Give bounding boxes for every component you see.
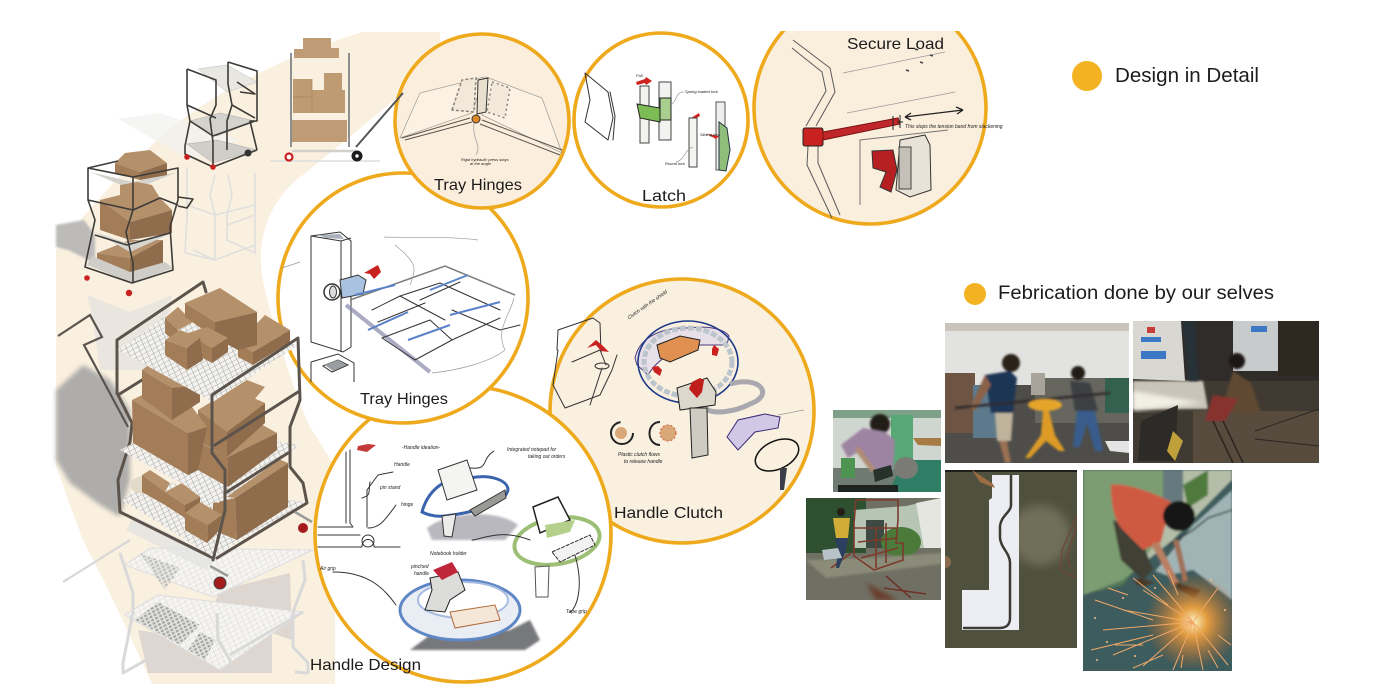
sketch: handle design details	[318, 444, 603, 650]
legend: febrication: Febrication done by our selves	[998, 283, 1274, 304]
front frame	[212, 338, 307, 560]
trolley 1: main loaded trolley	[58, 282, 312, 589]
photo: man at lathe	[833, 410, 941, 492]
sketch: secure load details	[792, 40, 1003, 218]
circle: secure load	[754, 0, 1003, 224]
photo: rust frame outdoors	[806, 498, 941, 600]
sketch: latch details: Spring loaded lock	[685, 89, 719, 94]
bottom tray	[122, 480, 307, 557]
sketch: handle design details: pinched	[410, 564, 429, 570]
trolley 3: empty frame	[118, 62, 257, 260]
reflection: trolley 2	[87, 295, 172, 370]
sketch: handle design details: Notebook holder	[430, 551, 467, 557]
sketch: handle design details: Tape grip	[566, 609, 587, 615]
circle: latch	[574, 33, 748, 207]
label: Handle Design: Handle Design	[310, 657, 421, 674]
circle: handle design	[315, 386, 611, 682]
circle: tray hinges large	[278, 173, 528, 423]
sketch: tray hinge column	[282, 232, 520, 382]
upper mesh tray	[118, 318, 298, 402]
photo: angle grinder sparks	[1083, 470, 1232, 671]
middle tray	[120, 425, 300, 503]
label: Latch: Latch	[642, 188, 686, 205]
label: Tray Hinges: Tray Hinges	[360, 391, 448, 408]
sketch: handle design details: -Handle ideation-	[402, 445, 440, 451]
reflection: trolley 3	[185, 167, 255, 260]
legend: design in detail	[1072, 61, 1259, 91]
photo: grinding at night	[1133, 321, 1319, 463]
circle: tray hinges upper	[395, 34, 569, 208]
label: Tray Hinges: Tray Hinges	[434, 177, 522, 194]
sketch: latch details	[585, 73, 730, 171]
sketch: handle design details: Handle	[394, 462, 410, 468]
casters	[298, 523, 308, 533]
sketch: handle clutch details: Clutch with the shield	[627, 289, 669, 321]
sketch: handle design details: handle	[414, 571, 429, 577]
top boxes	[165, 288, 290, 370]
sketch: handle clutch details: Plastic clutch flows	[618, 452, 660, 458]
top white band	[0, 0, 1400, 31]
sketch: hinge plates: Rigid hydraulic press stays	[461, 157, 509, 162]
sketch: handle clutch details: to release handle	[624, 459, 663, 465]
label: Handle Clutch: Handle Clutch	[614, 505, 723, 522]
sketch: handle clutch details	[553, 289, 804, 490]
sketch: secure load details: This stops the tension band from slackening	[905, 124, 1003, 130]
trolley 2: loaded	[56, 150, 193, 370]
background crescent	[56, 32, 440, 684]
sketch: handle design details: taking out orders	[528, 454, 566, 460]
reflection: main trolley	[63, 523, 313, 673]
photo: bending pipe in workshop	[945, 323, 1129, 463]
sketch: latch details: Pull	[636, 73, 643, 78]
circle: handle clutch	[550, 279, 814, 543]
sketch: latch details: Sliding lock	[700, 132, 721, 137]
shadow: main trolley	[56, 365, 130, 517]
sketch: handle design details: Air grip	[319, 566, 336, 572]
sketch: handle design details: pin stand	[379, 485, 401, 491]
sketch: hinge plates: at the angle	[470, 161, 492, 166]
sketch: hinge plates	[400, 77, 562, 166]
rear frame	[117, 282, 213, 558]
sketch: latch details: Round lock	[665, 161, 686, 166]
sketch: handle design details: hinge	[401, 502, 413, 508]
middle boxes	[132, 360, 277, 487]
trolley 4: side view	[270, 38, 403, 162]
sketch: handle design details: Integrated notepad for	[507, 447, 557, 453]
legend: design in detail: Design in Detail	[1115, 65, 1259, 87]
photo: pipe on template	[945, 470, 1077, 648]
bottom boxes	[142, 452, 288, 543]
label: Secure Load: Secure Load	[847, 36, 944, 53]
